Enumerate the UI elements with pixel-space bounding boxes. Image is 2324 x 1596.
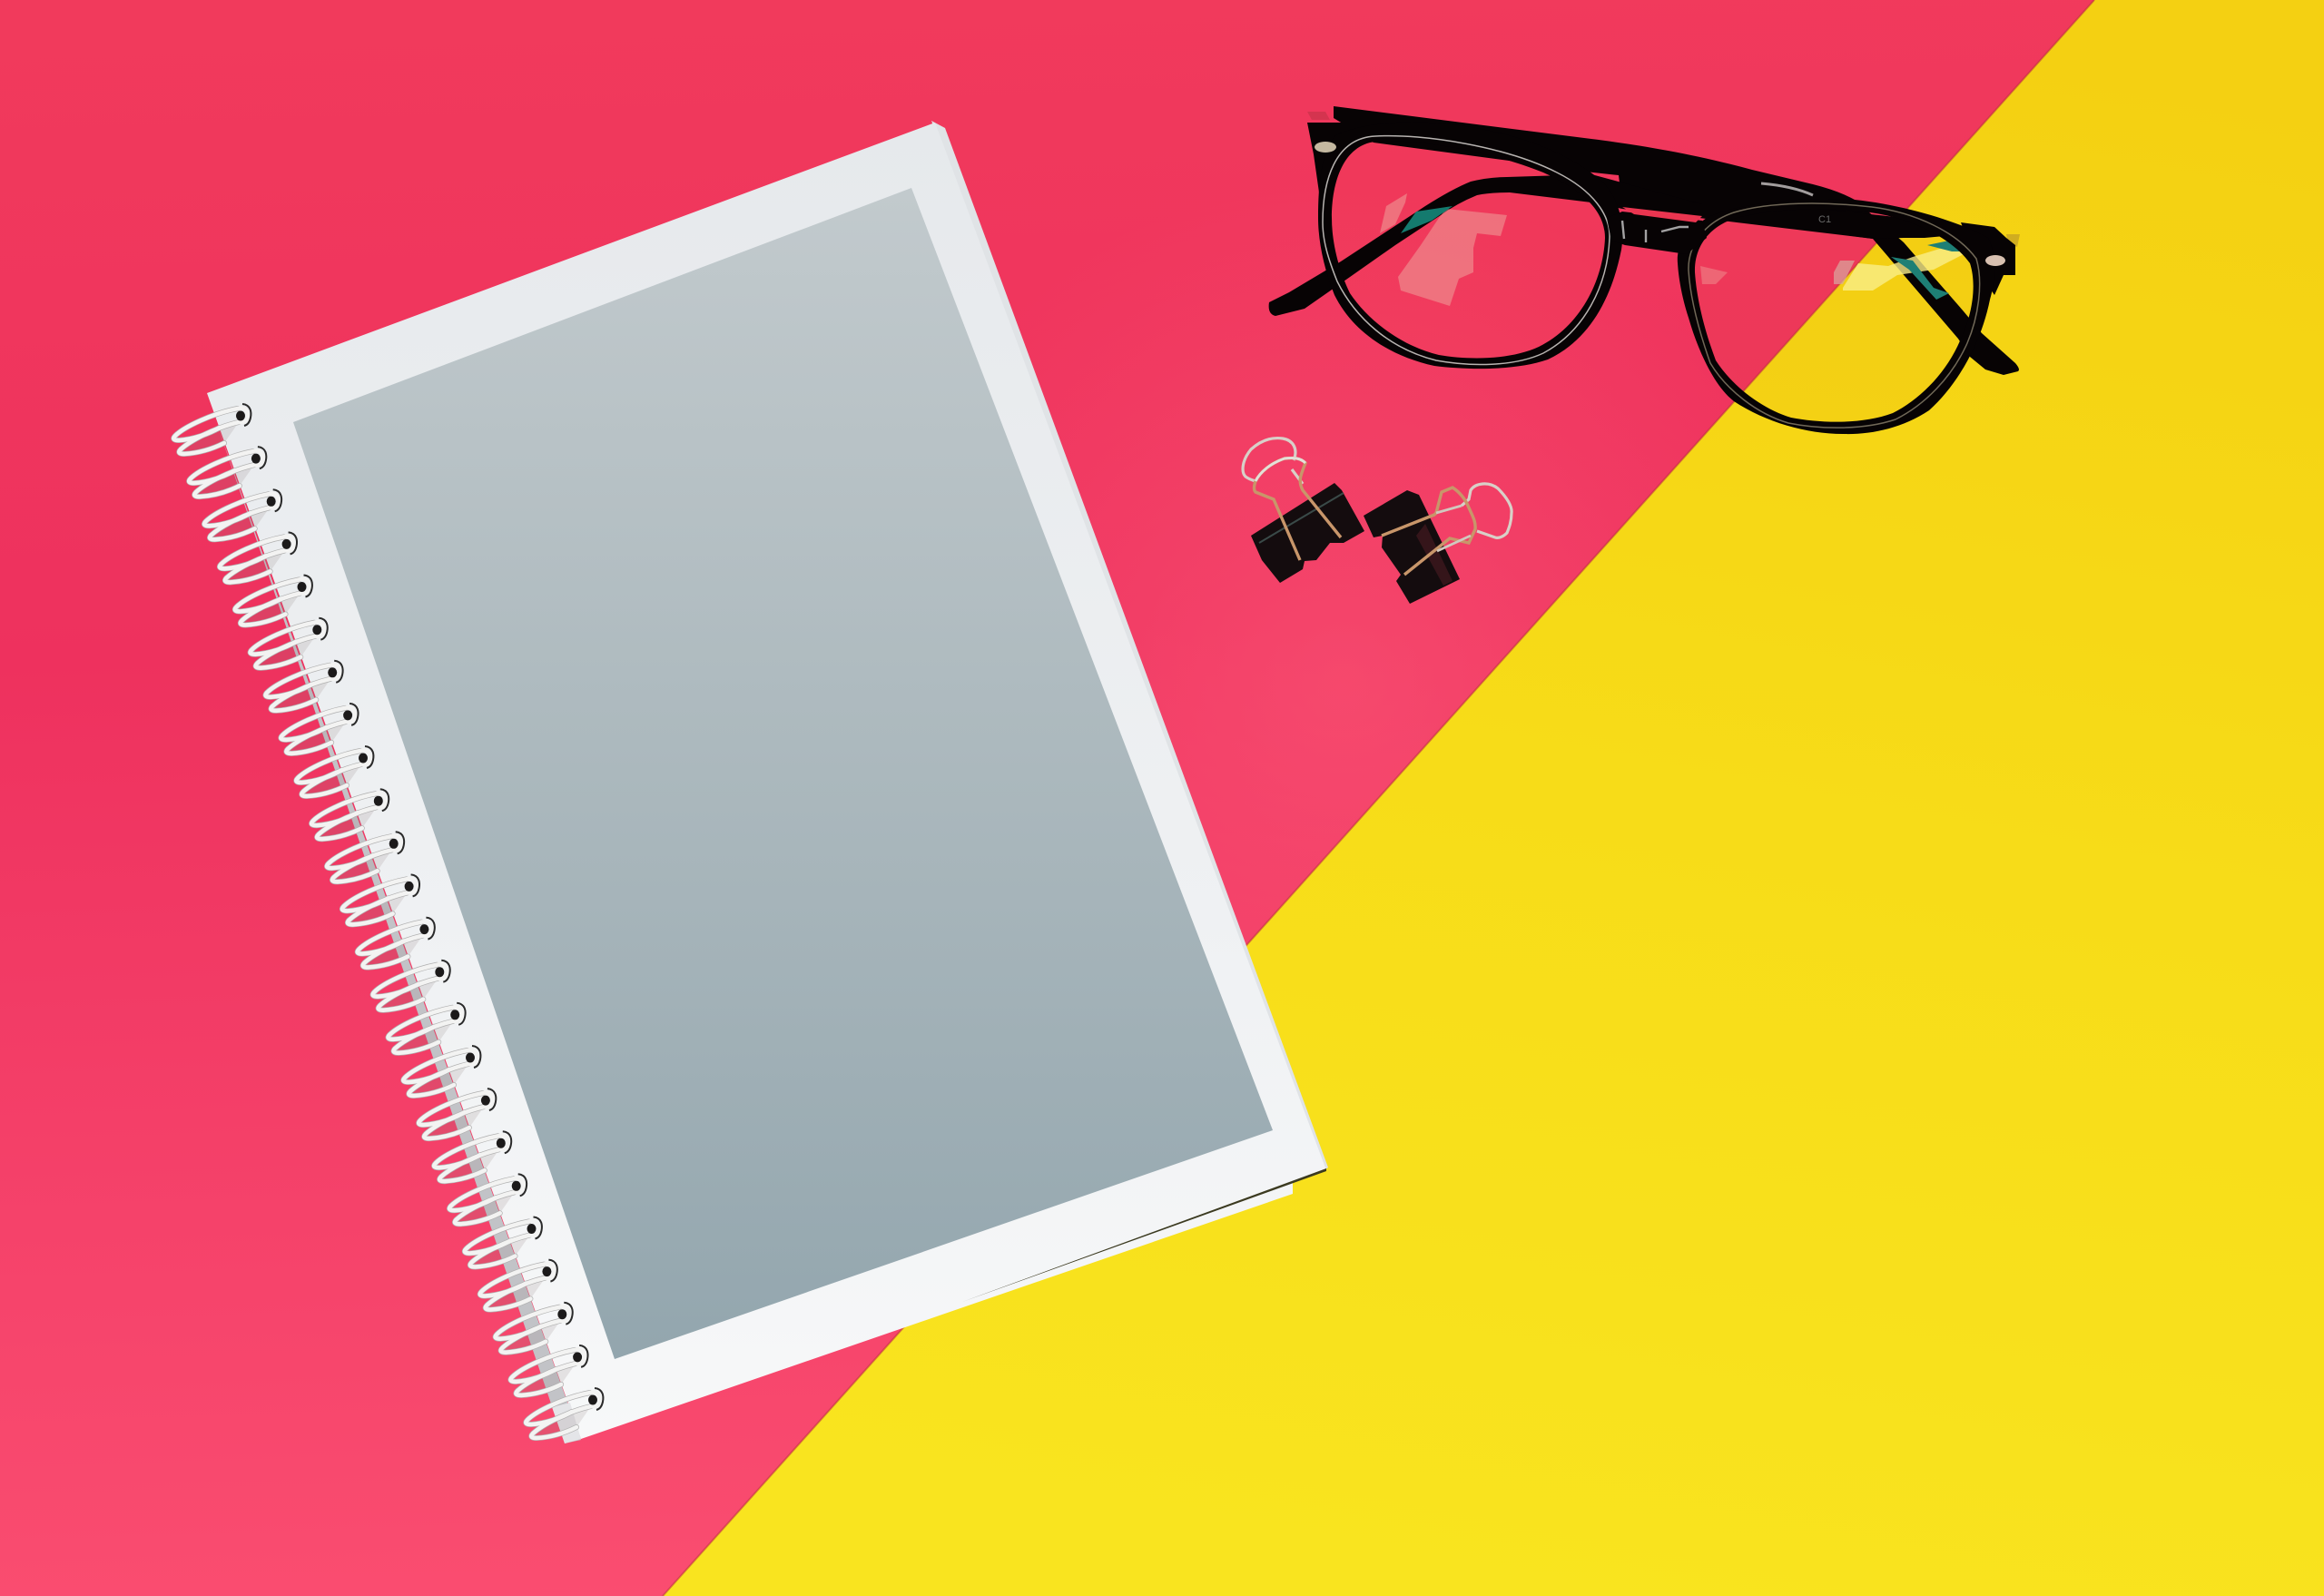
clip fold (1259, 493, 1344, 543)
eyeglasses (1269, 106, 2020, 434)
yellow diagonal background (663, 0, 2324, 1596)
left rivet (1315, 142, 1336, 153)
front wire top highlight (1256, 458, 1305, 481)
temple arm from left hinge (1334, 106, 2019, 375)
left lens frame (1318, 123, 1622, 369)
clip body (1364, 490, 1460, 604)
back sheet top right (931, 121, 1328, 1170)
right hinge block (1961, 222, 2015, 295)
bottom corner sheets (552, 1403, 581, 1443)
page stack edge (218, 427, 581, 1443)
temple glare (1761, 183, 1813, 195)
bridge gap (1622, 207, 1702, 222)
left lens reflection (1380, 193, 1507, 306)
clip side strip (1416, 524, 1452, 586)
bridge shine (1622, 221, 1689, 242)
notebook (173, 121, 1328, 1443)
left hinge tab (1307, 112, 1330, 120)
right hinge tab (2006, 234, 2020, 247)
front wire loop (1255, 458, 1341, 560)
lens tint right (1695, 209, 1974, 422)
dark gap line (962, 1168, 1326, 1302)
ring wire (1462, 484, 1512, 537)
lens tint left (1332, 141, 1605, 358)
right lens frame (1678, 199, 1994, 434)
back wire loop (1243, 438, 1303, 484)
upper wire (1382, 488, 1475, 575)
model mark: C1 (1818, 214, 1831, 225)
spiral binding rings (173, 404, 603, 1438)
left lens rim highlight (1323, 136, 1610, 365)
right lens rim highlight (1689, 203, 1980, 428)
bridge (1607, 212, 1707, 254)
left hinge block (1307, 123, 1410, 192)
lower wire strand (1436, 506, 1471, 551)
temple arm from right hinge (1269, 174, 1994, 316)
binder clip left (1243, 438, 1364, 583)
right rivet (1985, 255, 2005, 266)
grey placeholder panel (293, 188, 1273, 1359)
binder clip right (1364, 484, 1512, 604)
right lens reflection (1700, 241, 1964, 300)
clip body (1251, 483, 1364, 583)
notebook cover and bottom sheet (207, 123, 1326, 1439)
paper fold shadow line (663, 0, 2094, 1596)
